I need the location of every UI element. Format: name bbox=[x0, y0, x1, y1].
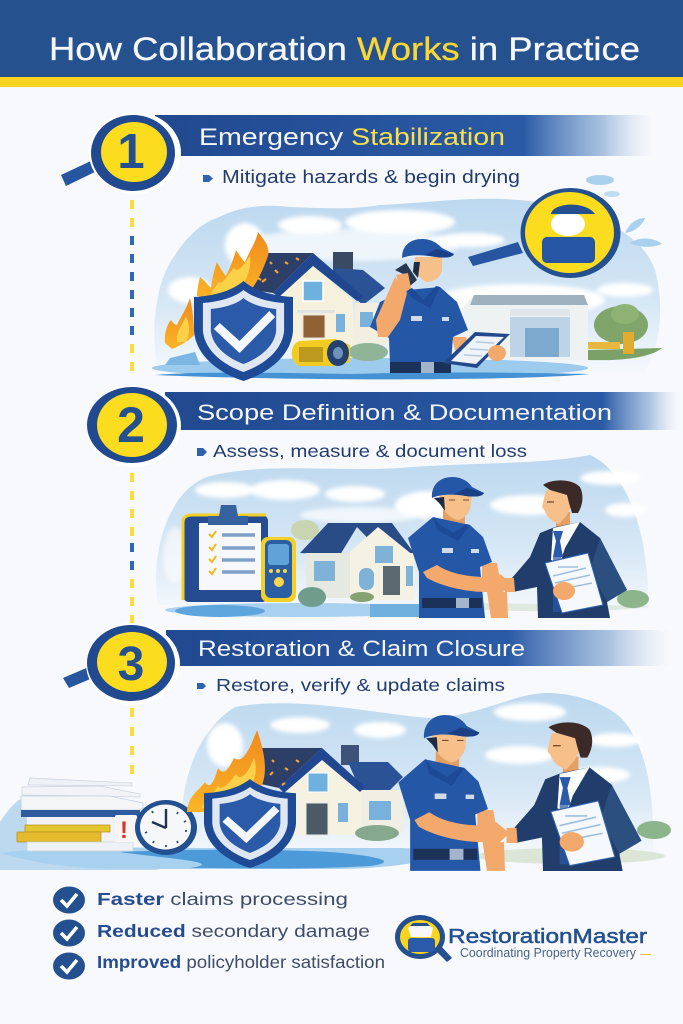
water extractor bbox=[292, 339, 350, 366]
header band bbox=[0, 0, 683, 87]
step 1 bullet: Mitigate hazards & begin drying bbox=[222, 167, 520, 187]
logo tagline: Coordinating Property Recovery bbox=[460, 946, 637, 960]
step 1 magnifier badge bbox=[61, 112, 181, 194]
house bbox=[256, 745, 403, 841]
step 3 magnifier badge: 3 bbox=[118, 638, 144, 691]
benefit: reduced damage: Reduced secondary damage bbox=[97, 921, 370, 941]
step 3 title bar bbox=[166, 630, 670, 666]
benefit: improved satisfaction: Improved policyholder satisfaction bbox=[97, 952, 385, 972]
logo icon bbox=[395, 915, 452, 962]
flames bbox=[187, 730, 265, 812]
step 1 scene bbox=[152, 175, 662, 381]
flames bbox=[165, 232, 268, 349]
benefit: faster claims: Faster claims processing bbox=[97, 889, 348, 909]
worker bbox=[398, 715, 509, 871]
title: How Collaboration Works in Practice bbox=[49, 31, 640, 67]
step 3 magnifier badge bbox=[63, 623, 180, 705]
logo wordmark: RestorationMaster bbox=[448, 926, 647, 948]
step 2 panel bbox=[87, 385, 680, 618]
benefit: faster claims bbox=[53, 886, 348, 914]
alert card bbox=[115, 815, 137, 844]
document stack bbox=[17, 778, 143, 851]
benefits list bbox=[53, 886, 385, 980]
step 2 title bar: Scope Definition & Documentation bbox=[197, 400, 612, 425]
step 1 title bar bbox=[155, 115, 653, 156]
step 2 title bar bbox=[165, 392, 680, 430]
water splashes bbox=[586, 175, 662, 247]
water bbox=[152, 348, 662, 379]
worker on phone bbox=[370, 239, 510, 373]
clipboard bbox=[183, 505, 268, 602]
step 1 magnifier badge: 1 bbox=[117, 125, 145, 179]
step 2 scene bbox=[156, 455, 650, 618]
house bbox=[291, 520, 414, 607]
step 1 panel bbox=[61, 112, 662, 381]
timeline connector bbox=[130, 200, 134, 774]
step 3 bullet: Restore, verify & update claims bbox=[216, 675, 505, 695]
step 3 title bar: Restoration & Claim Closure bbox=[198, 636, 525, 661]
step 1 title bar: Emergency Stabilization bbox=[199, 124, 505, 151]
house bbox=[252, 252, 388, 361]
adjuster bbox=[505, 480, 627, 618]
bush bbox=[637, 821, 671, 839]
garage bbox=[462, 295, 588, 360]
step 2 number badge bbox=[87, 385, 181, 467]
clock bbox=[135, 800, 197, 855]
step 3 scene bbox=[0, 693, 671, 871]
magnifier with worker icon bbox=[468, 188, 620, 278]
benefit: improved satisfaction bbox=[53, 952, 385, 980]
alert card: ! bbox=[120, 817, 128, 844]
bush bbox=[617, 590, 649, 608]
water bbox=[165, 603, 650, 617]
shield bbox=[204, 779, 296, 868]
adjuster bbox=[507, 722, 641, 871]
water and ground bbox=[0, 847, 665, 869]
step 3 panel bbox=[0, 623, 671, 871]
tree and fence bbox=[588, 304, 648, 354]
step 2 bullet: Assess, measure & document loss bbox=[213, 441, 527, 461]
moisture meter bbox=[261, 537, 296, 602]
step 2 number badge: 2 bbox=[117, 397, 145, 453]
worker bbox=[408, 477, 512, 618]
logo bbox=[395, 915, 651, 962]
shield bbox=[194, 281, 293, 381]
benefit: reduced damage bbox=[53, 920, 370, 946]
